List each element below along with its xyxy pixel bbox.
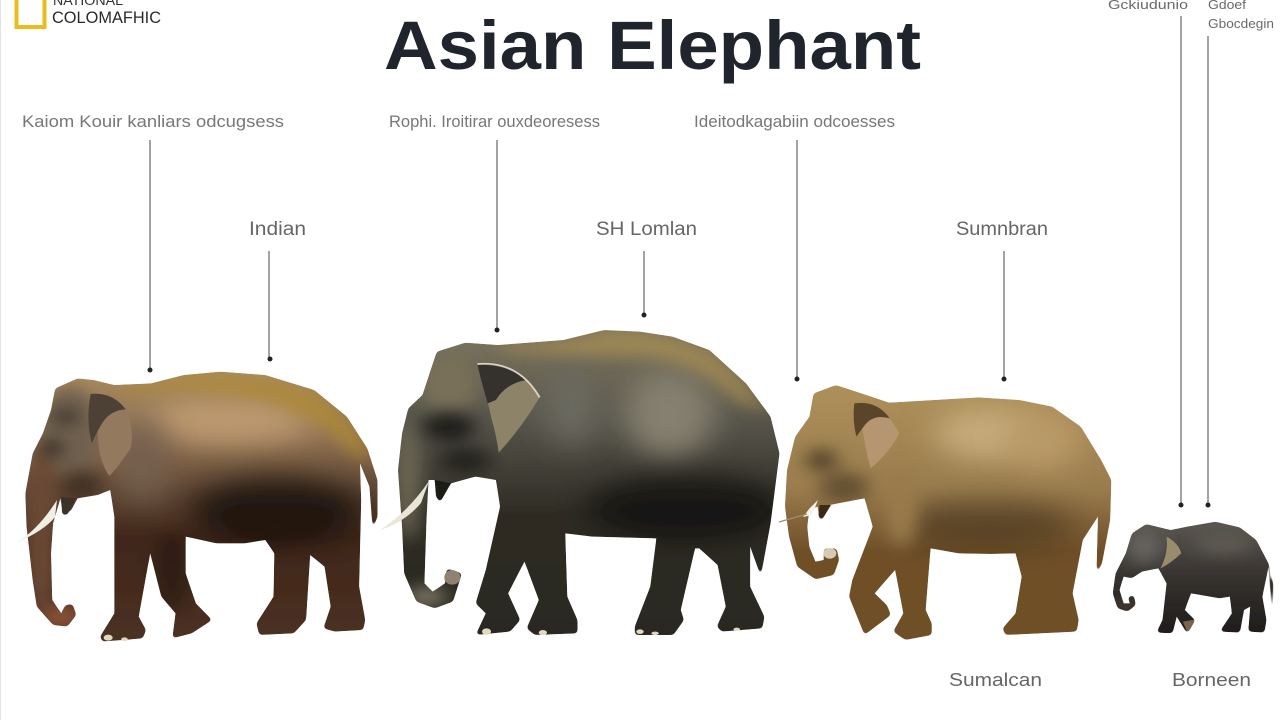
label: Sumatran lower: Sumalcan [949, 670, 1042, 690]
logo: yellow frame and wordmark [16, 0, 161, 27]
elephant: Sumatran [779, 380, 1118, 647]
label: Sri Lankan: SH Lomlan [596, 219, 697, 240]
caption: third elephant: Ideitodkagabiin odcoesses [694, 113, 895, 131]
leader lines [148, 16, 1210, 508]
toenails [104, 635, 128, 641]
title: Asian Elephant [384, 7, 921, 84]
trunk tip [823, 548, 836, 559]
logo: yellow frame and wordmark: COLOMAFHIC [52, 8, 161, 27]
caption: second elephant: Rophi. Iroitirar ouxdeoresess [389, 113, 600, 131]
top right captions [1108, 0, 1274, 31]
mouth [435, 480, 451, 503]
elephant: Bornean [1109, 520, 1277, 635]
ear [478, 365, 540, 453]
lifted foot [1183, 619, 1196, 633]
page edge line [0, 0, 1, 720]
ear [1160, 537, 1181, 568]
elephant: Sri Lankan [380, 330, 780, 636]
label: Sumatran upper: Sumnbran [956, 219, 1048, 240]
mouth [818, 505, 831, 521]
tusk [380, 481, 429, 530]
tusk [779, 500, 818, 522]
label: Bornean: Borneen [1172, 670, 1251, 690]
top right captions: Gbocdegin [1208, 16, 1274, 31]
ear [854, 403, 899, 468]
mouth [61, 497, 76, 515]
trunk tip [444, 570, 460, 585]
caption: first elephant: Kaiom Kouir kanliars odcugsess [22, 113, 284, 131]
label: Indian: Indian [249, 219, 306, 240]
ear [91, 394, 132, 476]
elephant: Indian [17, 372, 378, 642]
toenails [482, 628, 740, 635]
tusk [16, 500, 57, 543]
